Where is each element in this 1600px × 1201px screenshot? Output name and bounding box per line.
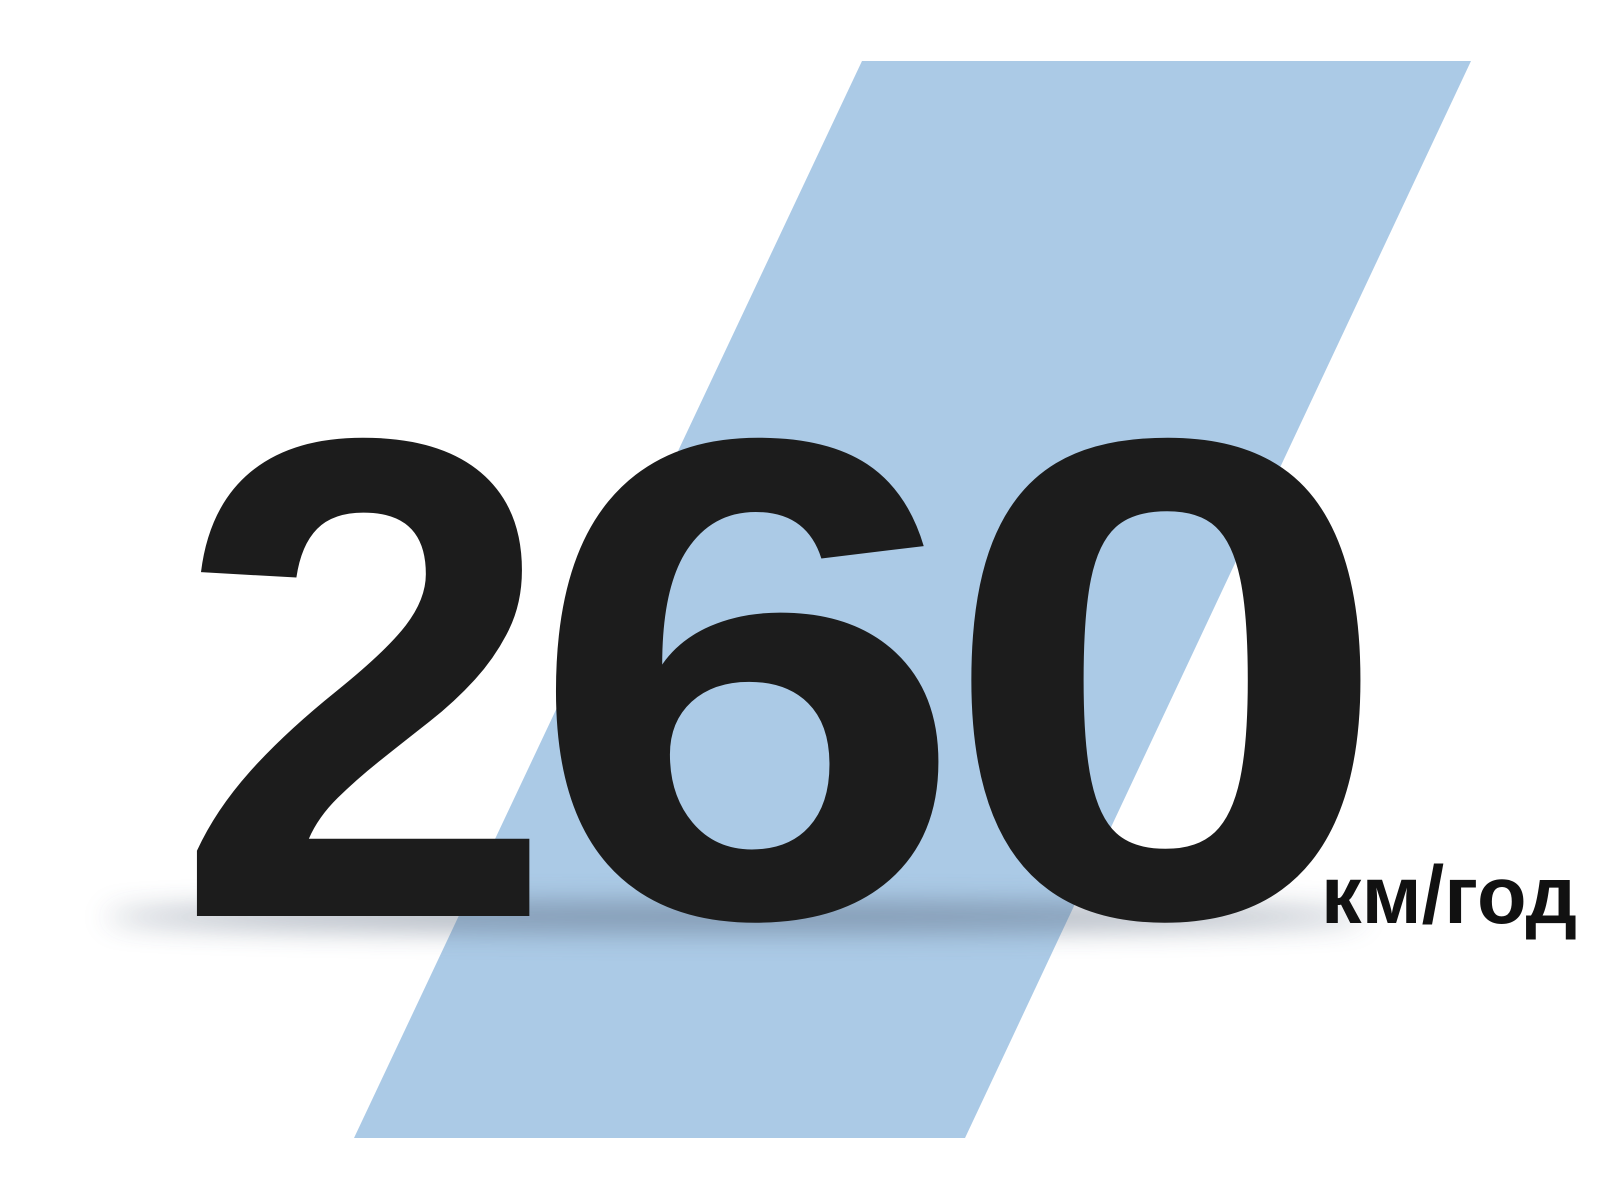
big number 260: 0 [939, 297, 1394, 1062]
unit label км/год: км/год [1321, 850, 1577, 941]
big number 260: 6 [527, 297, 967, 1062]
big number 260: 2 [173, 297, 557, 1062]
shadow under the number [105, 904, 1365, 930]
blue parallelogram background shape [354, 61, 1471, 1138]
big number 260 [173, 297, 1394, 1062]
